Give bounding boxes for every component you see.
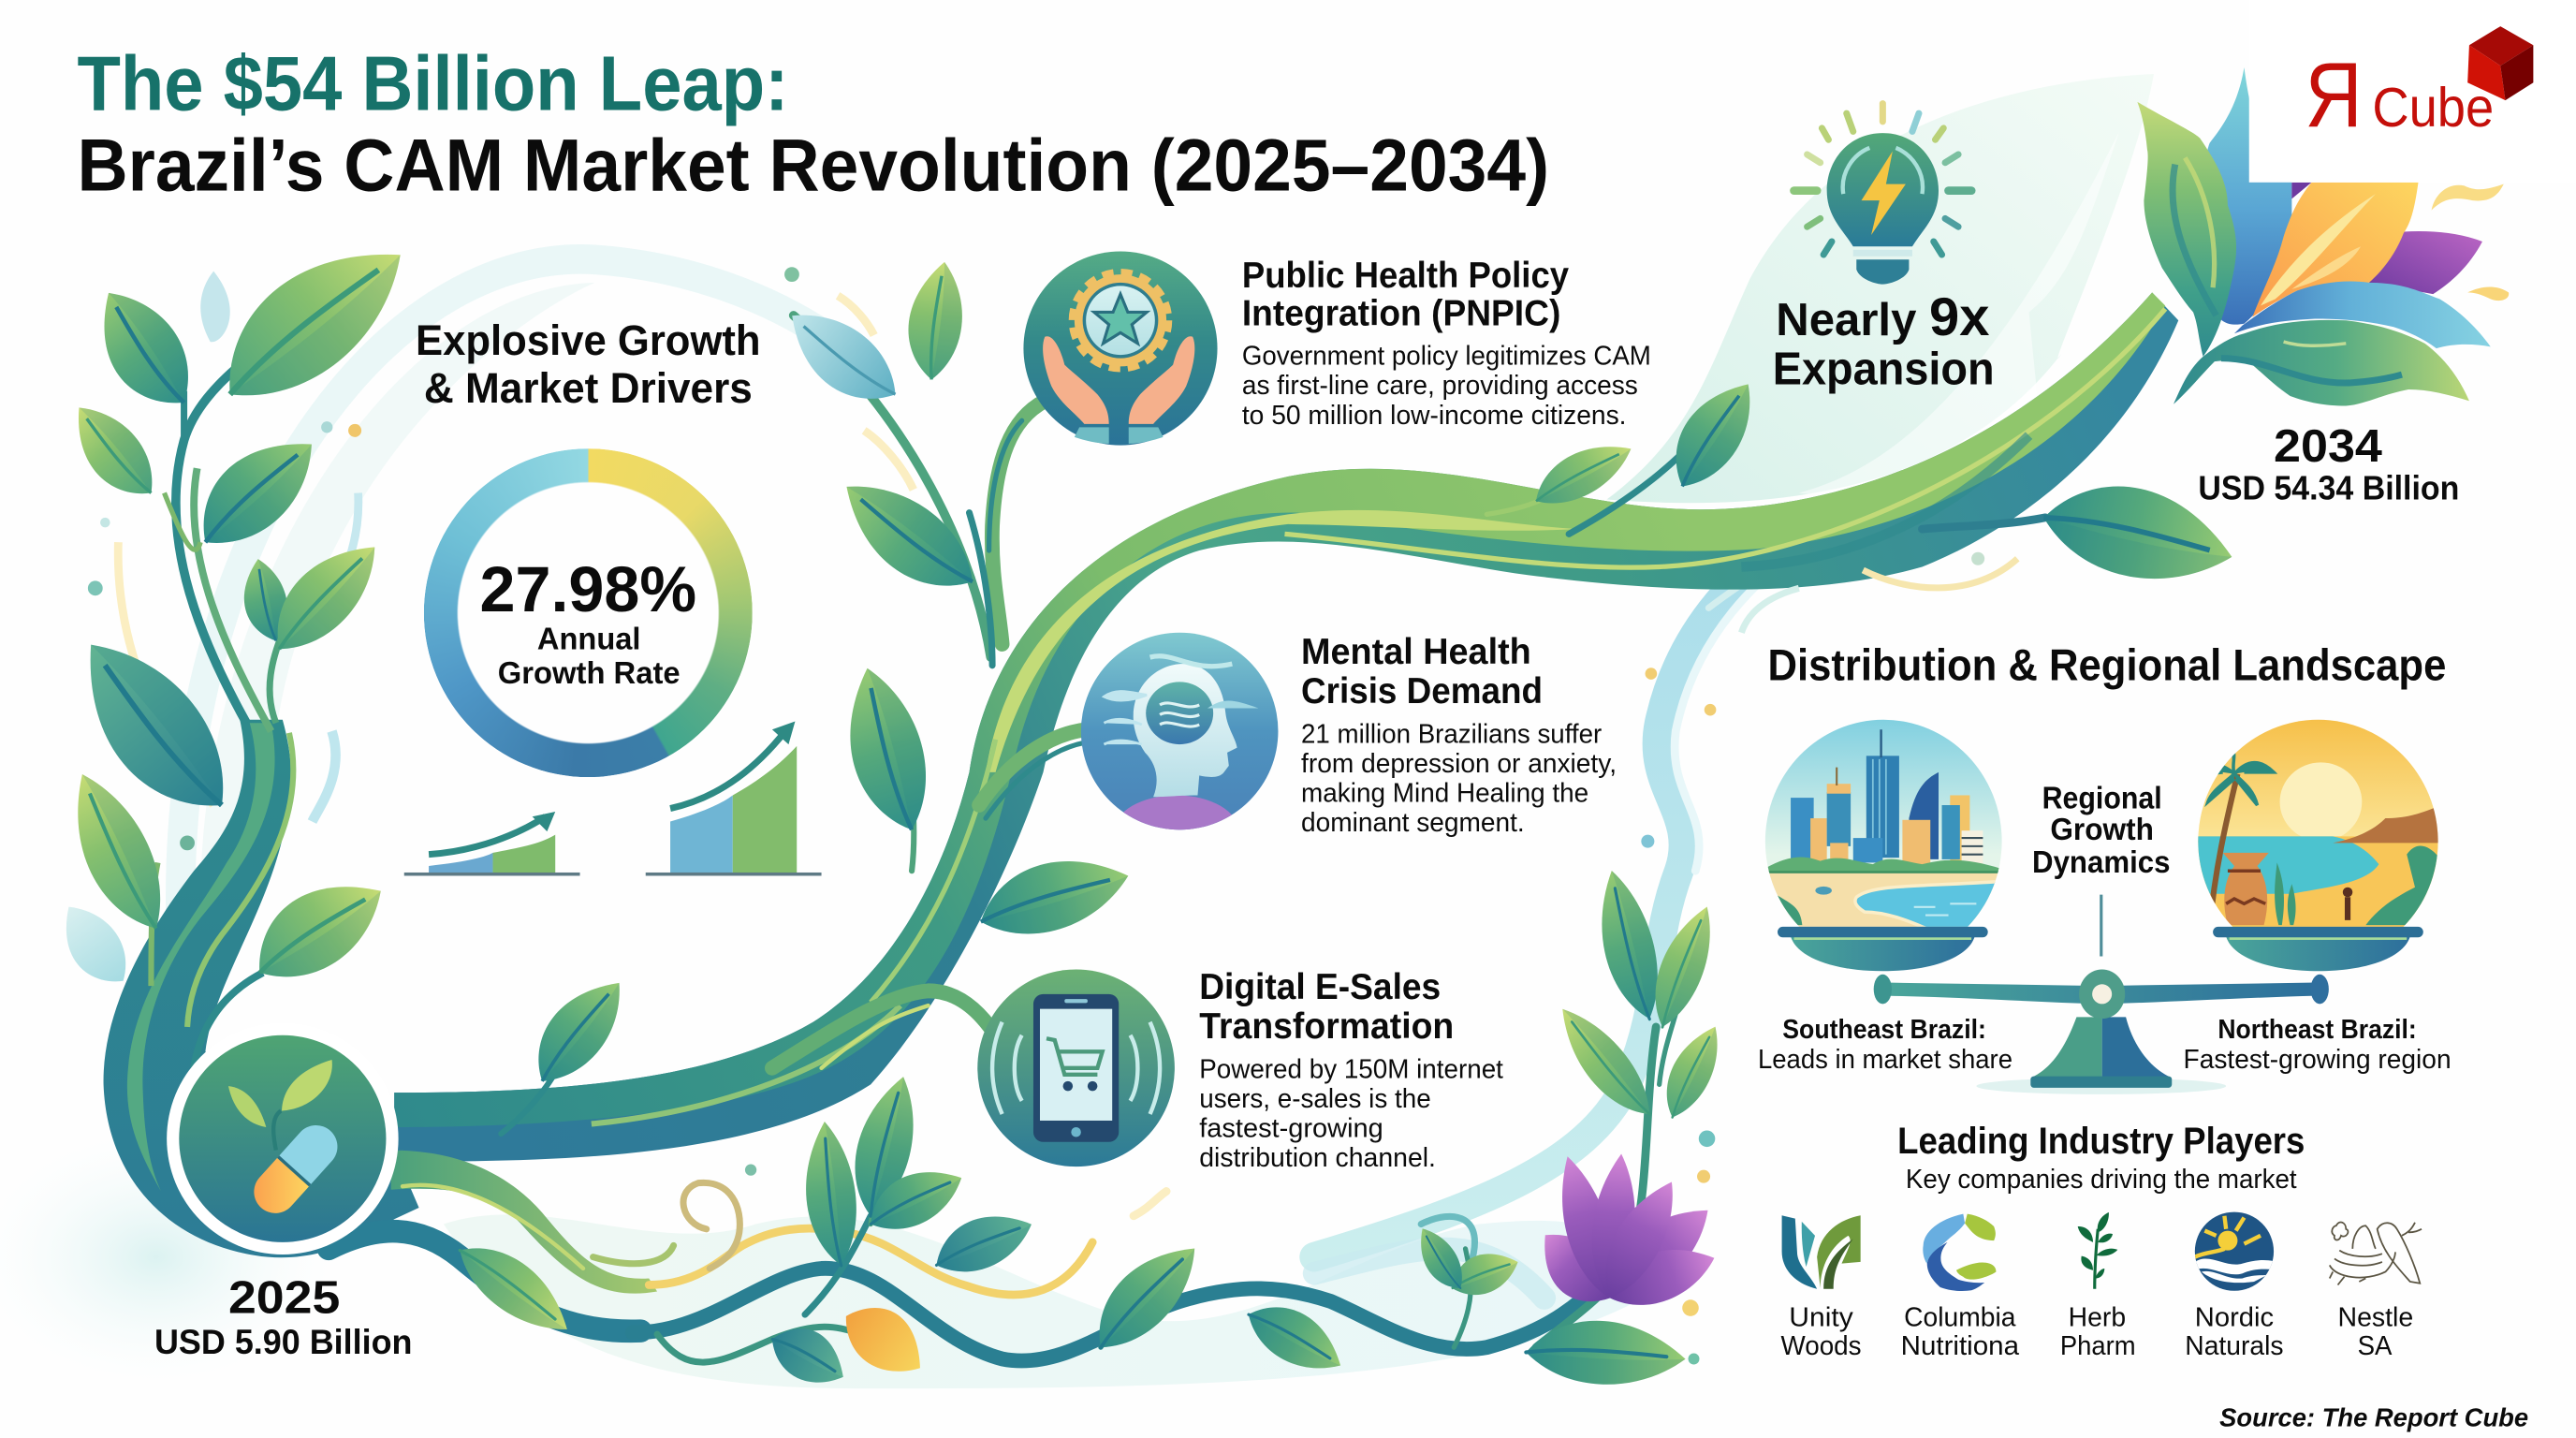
heading: leading industry players: Leading Industry Players xyxy=(1897,1121,2305,1162)
scale: regional growth balance xyxy=(1778,895,2423,1094)
text: mental health: making Mind Healing the xyxy=(1301,778,1588,808)
text: company names: Columbia xyxy=(1904,1302,2016,1332)
chart: small growth bars xyxy=(404,812,580,875)
icon: light bulb xyxy=(1794,104,1971,285)
text: nearly 9x expansion: Nearly 9x xyxy=(1776,287,1989,347)
text: mental health xyxy=(1301,632,1617,838)
title: Brazil’s CAM Market Revolution (2025–2034) xyxy=(77,125,1549,207)
text: nearly 9x expansion: Expansion xyxy=(1773,345,1995,395)
icon: digital e-sales xyxy=(977,970,1175,1167)
text: company names: Nordic xyxy=(2195,1302,2274,1332)
text: public health policy: to 50 million low-income citizens. xyxy=(1242,401,1627,431)
donut chart: annual growth rate: 27.98% xyxy=(479,553,696,625)
text: digital e-sales: fastest-growing xyxy=(1199,1114,1383,1144)
icon: northeast beach scene xyxy=(2193,716,2448,930)
logo: unity woods xyxy=(1782,1215,1861,1289)
logo: RCube: Я xyxy=(2305,43,2363,146)
bottom wavy vines xyxy=(329,865,1731,1397)
text: 2025 value: 2025 xyxy=(228,1272,340,1323)
text: digital e-sales: Powered by 150M internet xyxy=(1199,1054,1503,1084)
chart: large growth bars xyxy=(646,721,822,875)
text: public health policy: as first-line care, providing access xyxy=(1242,371,1638,401)
text: mental health: dominant segment. xyxy=(1301,808,1525,838)
icon: 2034 flower xyxy=(2137,67,2509,406)
text: mental health: 21 million Brazilians suffer xyxy=(1301,719,1603,749)
text: southeast brazil: Leads in market share xyxy=(1758,1045,2012,1075)
heading: leading industry players: Key companies driving the market xyxy=(1906,1165,2297,1195)
title: The $54 Billion Leap: xyxy=(77,41,788,127)
text: public health policy: Public Health Policy xyxy=(1242,256,1570,296)
text: regional growth dynamics: Growth xyxy=(2050,813,2154,847)
text: company names: Herb xyxy=(2069,1302,2126,1332)
text: company names: Nestle xyxy=(2338,1302,2413,1332)
logo: RCube xyxy=(2305,26,2533,146)
text: public health policy: Integration (PNPIC) xyxy=(1242,294,1560,334)
text: digital e-sales: Transformation xyxy=(1199,1006,1454,1047)
vine leaves xyxy=(518,258,2242,1097)
text: company names: Naturals xyxy=(2185,1331,2284,1361)
text: southeast brazil xyxy=(1758,1015,2012,1075)
logo: herb pharm xyxy=(2078,1212,2117,1289)
text: regional growth dynamics: Regional xyxy=(2042,782,2162,816)
water ribbon xyxy=(1314,501,1865,1364)
heading: leading industry players xyxy=(1897,1121,2305,1195)
heading: explosive growth: Explosive Growth xyxy=(416,316,761,364)
branch vines to driver circles xyxy=(501,315,2045,1134)
text: regional growth dynamics: Dynamics xyxy=(2032,845,2170,880)
text: 2034 value xyxy=(2198,421,2459,507)
text: company names: Unity xyxy=(1789,1302,1853,1332)
text: regional growth dynamics xyxy=(2032,782,2170,880)
left vine cluster xyxy=(47,214,428,1257)
text: southeast brazil: Southeast Brazil: xyxy=(1782,1015,1986,1045)
heading: explosive growth: & Market Drivers xyxy=(424,364,753,412)
heading: distribution and regional landscape: Distribution & Regional Landscape xyxy=(1767,641,2446,691)
text: digital e-sales: users, e-sales is the xyxy=(1199,1084,1431,1114)
text: digital e-sales: distribution channel. xyxy=(1199,1143,1436,1173)
source note: Source: The Report Cube xyxy=(2219,1402,2528,1431)
main growth vine xyxy=(394,292,2178,1162)
text: company names xyxy=(1781,1302,2413,1361)
text: mental health: Crisis Demand xyxy=(1301,671,1543,712)
logo: RCube: Cube xyxy=(2372,76,2494,139)
flourish under 2034 xyxy=(1741,552,2017,633)
text: company names: SA xyxy=(2358,1331,2393,1361)
logo: nestle xyxy=(2330,1222,2422,1284)
pale arc behind growth panel xyxy=(88,259,914,920)
mint leaf backdrop behind 9x expansion xyxy=(1606,74,2154,503)
text: northeast brazil xyxy=(2184,1015,2452,1075)
bottom pale wash xyxy=(444,1214,1643,1388)
text: 2025 value xyxy=(154,1272,413,1361)
logo: nordic naturals xyxy=(2195,1212,2277,1291)
logo backing xyxy=(2249,0,2576,183)
icon: public health policy xyxy=(1023,252,1218,446)
text: northeast brazil: Northeast Brazil: xyxy=(2217,1015,2417,1045)
logo: columbia nutritional xyxy=(1923,1214,1996,1291)
icon: purple lotus flower xyxy=(1525,1151,1724,1319)
text: digital e-sales: Digital E-Sales xyxy=(1199,967,1441,1007)
title xyxy=(77,41,1549,207)
donut chart: annual growth rate: Growth Rate xyxy=(498,656,681,691)
heading: explosive growth xyxy=(416,316,761,412)
text: mental health: from depression or anxiety, xyxy=(1301,749,1617,779)
icon: 2025 seedling capsule xyxy=(167,1023,399,1255)
text: company names: Woods xyxy=(1781,1331,1862,1361)
text: company names: Nutritiona xyxy=(1901,1331,2020,1361)
donut chart: annual growth rate xyxy=(424,448,753,776)
donut chart: annual growth rate: Annual xyxy=(537,622,640,656)
text: mental health: Mental Health xyxy=(1301,632,1531,672)
text: northeast brazil: Fastest-growing region xyxy=(2184,1045,2452,1075)
text: digital e-sales xyxy=(1199,967,1503,1173)
text: company names: Pharm xyxy=(2060,1331,2136,1361)
text: public health policy xyxy=(1242,256,1651,431)
text: 2034 value: 2034 xyxy=(2274,421,2383,472)
text: public health policy: Government policy legitimizes CAM xyxy=(1242,342,1651,372)
icon: mental health xyxy=(1080,633,1279,829)
text: 2025 value: USD 5.90 Billion xyxy=(154,1323,413,1361)
text: 2034 value: USD 54.34 Billion xyxy=(2198,469,2459,507)
text: nearly 9x expansion xyxy=(1773,287,1995,395)
icon: southeast city scene xyxy=(1758,716,2012,930)
